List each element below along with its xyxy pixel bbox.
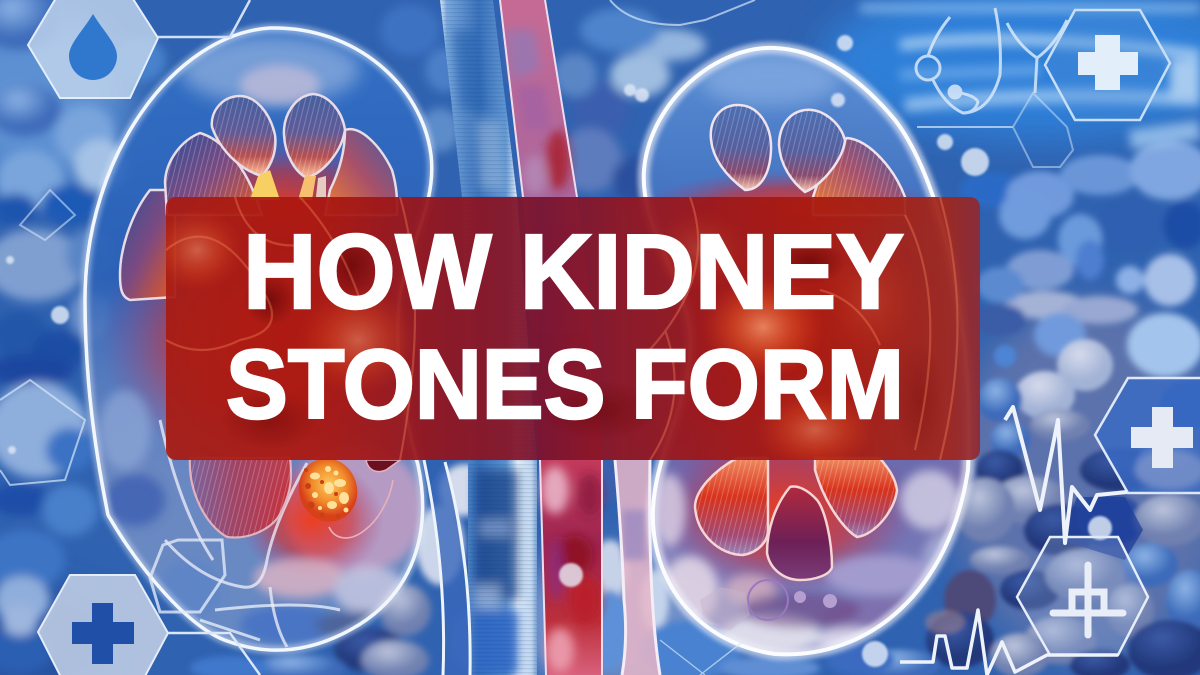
icon: hexagon plus bottom left bbox=[38, 575, 260, 675]
ECG line upper bbox=[1005, 407, 1127, 543]
streaks: top-right light bands bbox=[860, 8, 1200, 140]
pebbles: right lower bbox=[860, 339, 1200, 675]
pebbles: top centre bbox=[380, 4, 706, 204]
title bbox=[226, 213, 904, 439]
icon: hexagon symbol bottom right bbox=[1017, 497, 1148, 655]
hexagon outline inside left kidney bbox=[150, 540, 225, 612]
ECG line lower bbox=[900, 610, 1118, 675]
pebbles: right upper bbox=[960, 140, 1200, 377]
pebbles: bottom centre bbox=[190, 458, 894, 675]
kidney: right bbox=[634, 38, 978, 664]
kidney calyces: left upper bbox=[120, 94, 397, 300]
title line 1: HOW KIDNEY bbox=[243, 213, 904, 331]
stripes on right petals bbox=[711, 105, 905, 197]
vessel: blue vein bbox=[440, 0, 537, 675]
banner: anatomy showing through bbox=[151, 197, 958, 470]
kidney: left bbox=[80, 20, 440, 660]
ureter: right bbox=[615, 460, 660, 675]
icon: stethoscope bbox=[916, 8, 1067, 113]
vessel: red artery bbox=[500, 0, 602, 675]
banner bbox=[151, 197, 980, 470]
kidney rim: left bbox=[85, 28, 432, 650]
kidney calyces: right lower bbox=[695, 458, 897, 580]
kidney rim: right bbox=[644, 48, 969, 654]
icon: hexagon plus top right bbox=[1045, 10, 1170, 120]
icon: kidney stone bbox=[291, 451, 365, 529]
pebbles: left column bbox=[0, 0, 166, 674]
icon: hexagon plus right bbox=[1095, 378, 1200, 493]
kidney calyces: left lower bbox=[190, 458, 400, 538]
kidney calyces: right upper bbox=[711, 105, 905, 215]
title line 2: STONES FORM bbox=[226, 329, 904, 439]
glowing hilum: left bbox=[250, 170, 326, 200]
stripes on left petals bbox=[165, 94, 345, 197]
ureter: left bbox=[424, 460, 470, 675]
icon: hexagon water drop bbox=[28, 0, 250, 98]
